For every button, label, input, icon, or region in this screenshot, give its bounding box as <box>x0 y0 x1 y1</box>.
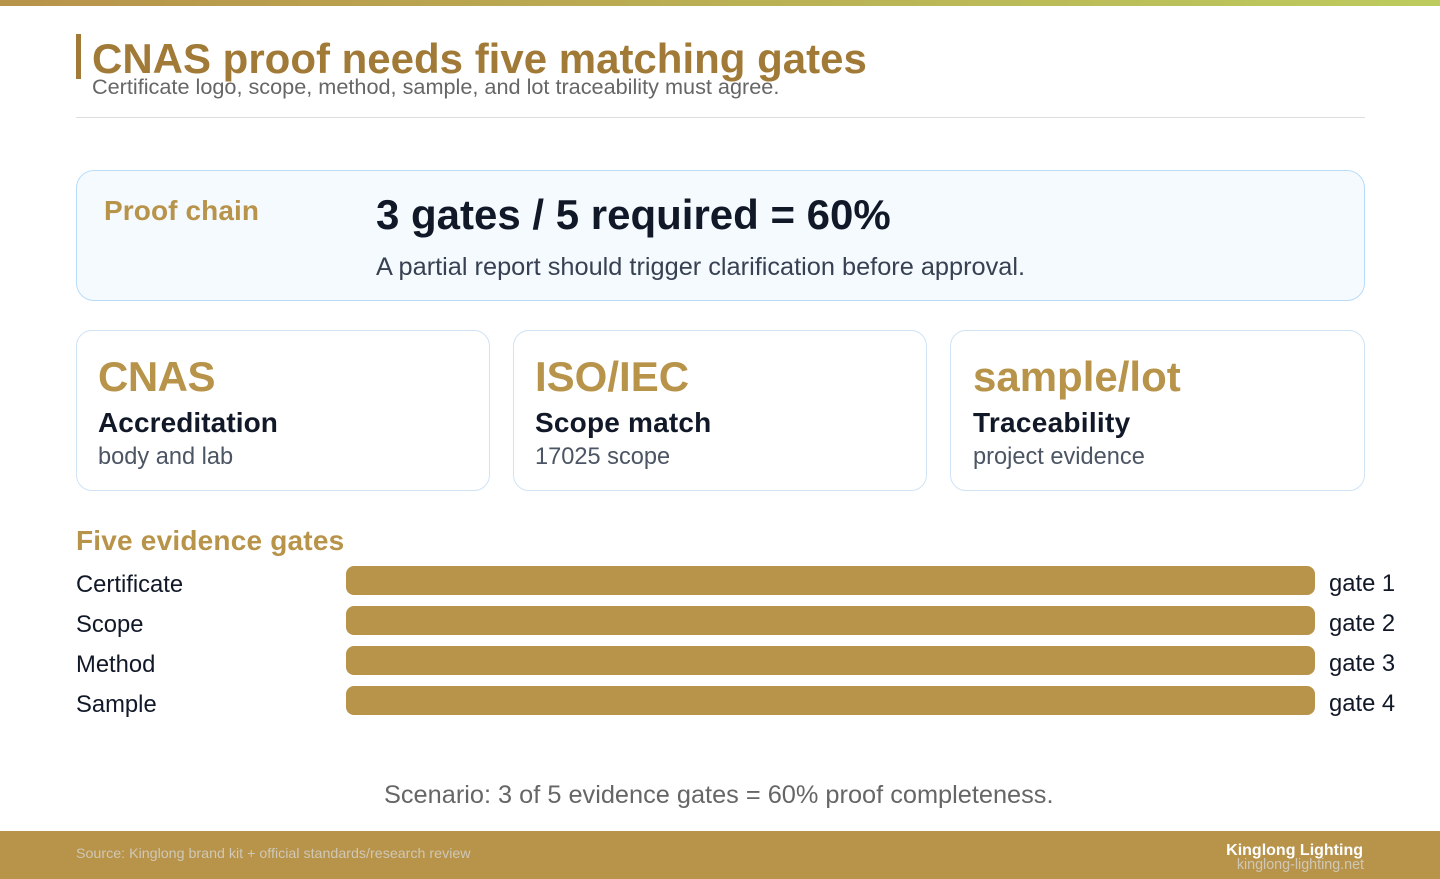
panel: proof chain <box>76 170 1365 301</box>
row value: gate 2: gate 2 <box>1329 610 1395 637</box>
proof note: A partial report should trigger clarification before approval. <box>376 253 1025 281</box>
card: ISO/IEC <box>513 330 927 491</box>
card value: ISO/IEC <box>535 352 689 400</box>
title accent bar <box>76 34 81 79</box>
card note: body and lab <box>98 444 233 470</box>
card: CNAS <box>76 330 490 491</box>
source: Source: Kinglong brand kit + official standards/research review <box>76 846 471 862</box>
row label: Certificate: Certificate <box>76 571 183 598</box>
card heading: Accreditation <box>98 407 278 438</box>
card heading: Scope match <box>535 407 711 438</box>
card heading: Traceability <box>973 407 1130 438</box>
row value: gate 4: gate 4 <box>1329 690 1395 717</box>
row label: Method: Method <box>76 651 155 678</box>
row value: gate 1: gate 1 <box>1329 570 1395 597</box>
row label: Scope: Scope <box>76 611 143 638</box>
top gradient bar <box>0 0 1440 6</box>
bar chart: evidence gates <box>76 566 1395 718</box>
title: CNAS proof needs five matching gates <box>92 35 867 82</box>
card: sample/lot <box>950 330 1365 491</box>
bar: gate 1 <box>346 566 1315 595</box>
proof chain label: Proof chain <box>104 195 259 226</box>
bar: gate 4 <box>346 686 1315 715</box>
header <box>76 34 1365 118</box>
card note: 17025 scope <box>535 444 670 470</box>
footer <box>0 831 1440 879</box>
brand url: kinglong-lighting.net <box>1237 857 1364 873</box>
bar: gate 3 <box>346 646 1315 675</box>
bar: gate 2 <box>346 606 1315 635</box>
card value: sample/lot <box>973 352 1181 400</box>
section heading: Five evidence gates <box>76 525 344 556</box>
brand name: Kinglong Lighting <box>1226 842 1363 859</box>
card note: project evidence <box>973 444 1145 470</box>
row value: gate 3: gate 3 <box>1329 650 1395 677</box>
scenario note: Scenario: 3 of 5 evidence gates = 60% proof completeness. <box>384 781 1054 809</box>
row label: Sample: Sample <box>76 691 157 718</box>
proof formula: 3 gates / 5 required = 60% <box>376 191 891 238</box>
card value: CNAS <box>98 352 215 400</box>
subtitle: Certificate logo, scope, method, sample, and lot traceability must agree. <box>92 74 779 99</box>
